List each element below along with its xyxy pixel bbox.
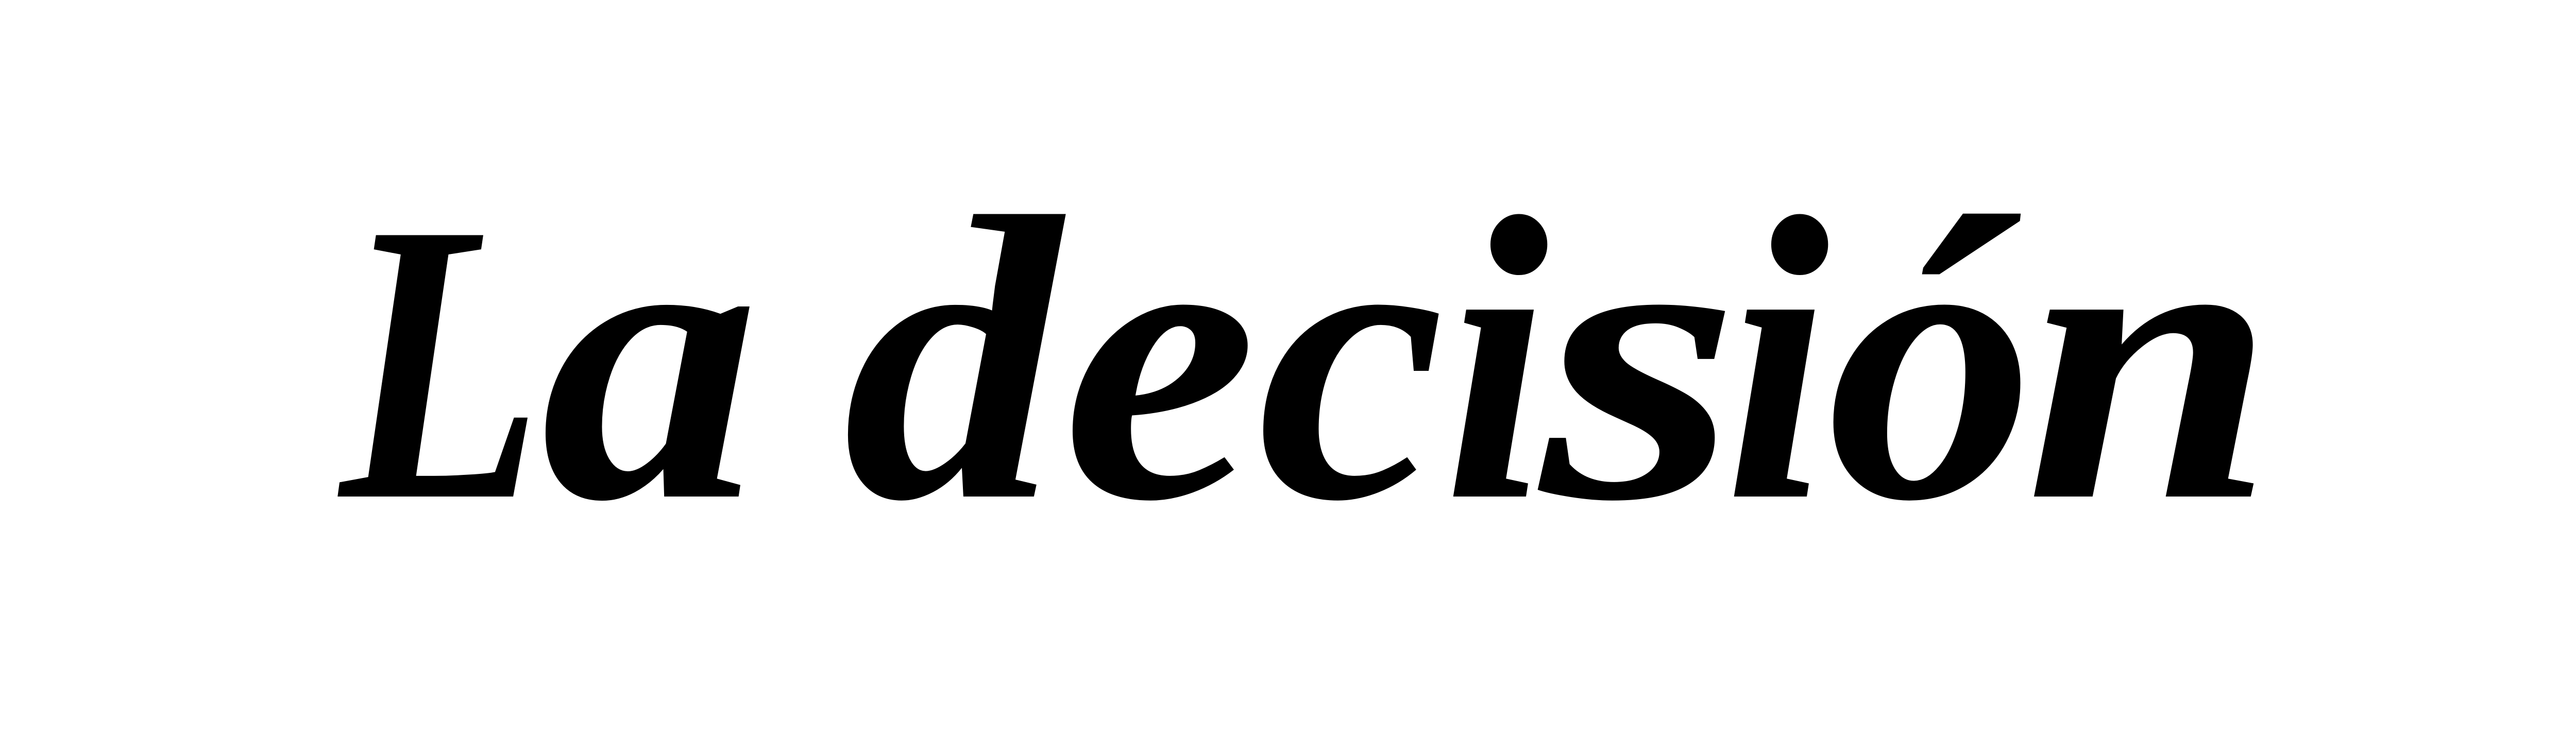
title: c [1257,133,1445,585]
title: d [843,133,1060,585]
title: a [540,133,760,585]
title: ó [1827,133,2035,585]
title: n [2025,133,2276,585]
title: i [1724,133,1830,585]
title: s [1540,133,1741,585]
title: e [1062,133,1257,585]
title: i [1444,133,1549,585]
title: L [340,140,543,583]
